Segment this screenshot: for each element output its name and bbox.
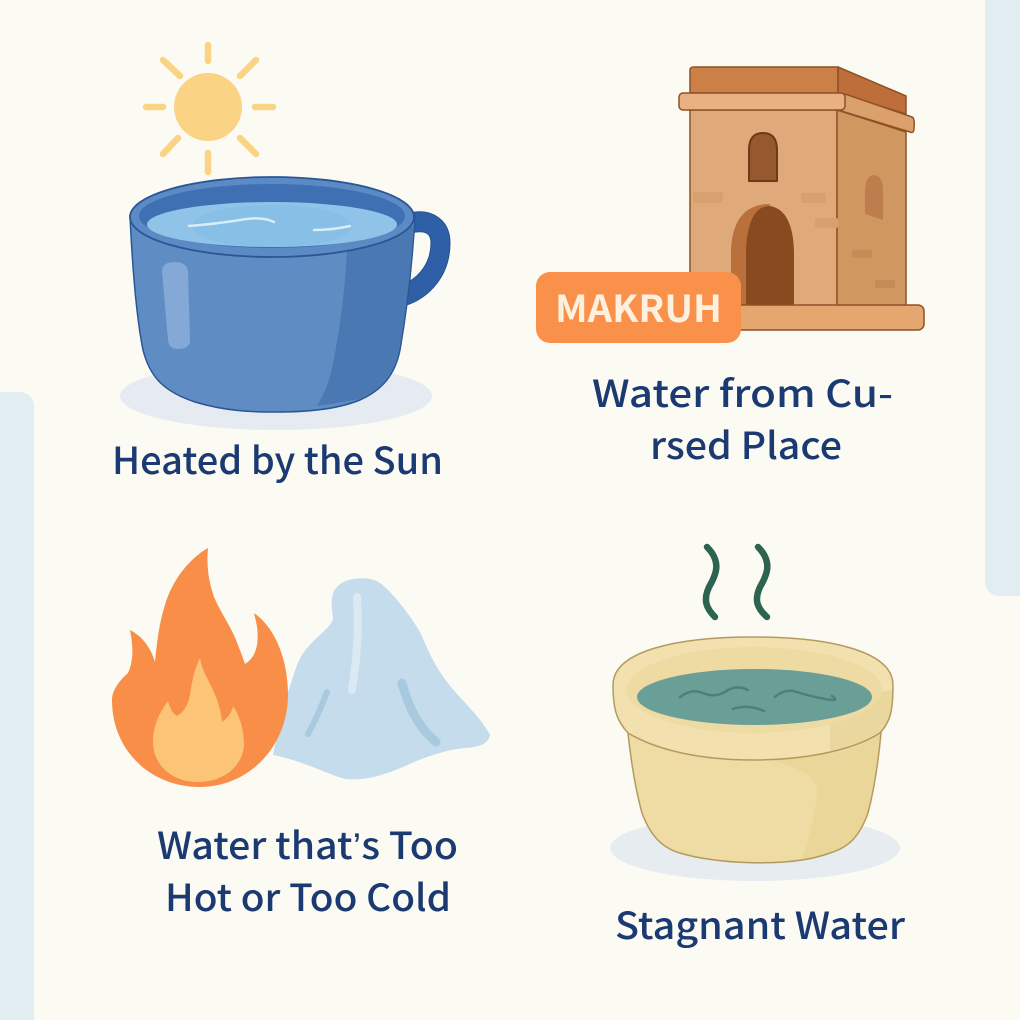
label: Water that's Too Hot or Too Cold: Water that ’s Too	[157, 816, 458, 870]
label: Water from Cursed Place: Water from Cu-	[592, 364, 893, 418]
label: Water that's Too Hot or Too Cold: Hot or Too Cold	[165, 868, 451, 922]
icon: ice mound	[273, 578, 490, 779]
badge: MAKRUH	[536, 272, 741, 343]
label: Heated by the Sun: Heated by the Sun	[112, 431, 443, 485]
icon: cursed building	[679, 67, 924, 330]
icon: blue pot with water	[120, 177, 450, 430]
panel edge: bottom left	[0, 392, 34, 1020]
label: Water from Cursed Place	[592, 364, 893, 470]
icon: steam	[706, 547, 767, 617]
icon: sun	[146, 45, 273, 172]
badge: MAKRUH: MAKRUH	[555, 279, 722, 333]
label: Water from Cursed Place: rsed Place	[650, 416, 842, 470]
label: Water that's Too Hot or Too Cold	[157, 816, 458, 922]
icon: flame	[112, 548, 288, 787]
panel edge: top right	[985, 0, 1020, 596]
icon: stagnant water basin	[610, 637, 900, 881]
label: Stagnant Water: Stagnant Water	[615, 896, 906, 950]
